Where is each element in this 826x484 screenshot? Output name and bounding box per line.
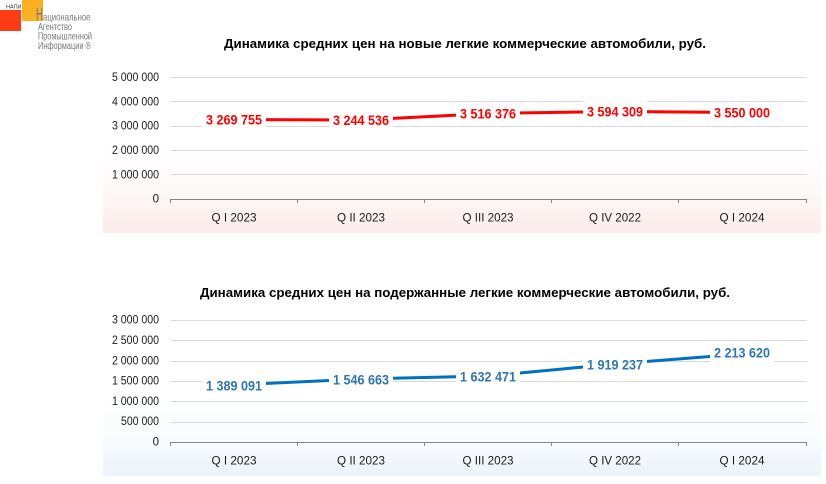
- x axis and labels: Q I 2023: [212, 212, 256, 224]
- logo: НАПИ: НАПИ: [6, 4, 22, 10]
- y axis gridlines and labels: 1 500 000: [112, 376, 159, 388]
- data labels: used vehicle prices: 1 389 091: [206, 378, 262, 394]
- y axis gridlines and labels: [112, 314, 806, 448]
- panel background: red gradient: [103, 140, 821, 233]
- data labels: new vehicle prices: 3 269 755: [206, 112, 262, 128]
- x axis and labels: Q I 2024: [720, 212, 765, 224]
- y axis gridlines and labels: 5 000 000: [112, 72, 159, 84]
- data labels: new vehicle prices: 3 516 376: [460, 106, 516, 122]
- panel: new vehicles chart: [103, 37, 821, 233]
- line series: new vehicle prices: [234, 112, 742, 120]
- logo: НАПИ: Агентство: [38, 21, 72, 33]
- y axis gridlines and labels: 3 000 000: [112, 120, 159, 132]
- x axis and labels: Q IV 2022: [589, 212, 641, 224]
- line series: used vehicle prices: [234, 354, 742, 385]
- logo: НАПИ: ациональное: [43, 12, 91, 24]
- x axis and labels: Q III 2023: [462, 212, 514, 224]
- y axis gridlines and labels: 2 000 000: [112, 145, 159, 157]
- panel: used vehicles chart: [103, 286, 821, 476]
- x axis and labels: Q II 2023: [337, 456, 385, 468]
- data labels: new vehicle prices: 3 244 536: [333, 113, 389, 128]
- panel background: blue gradient: [103, 395, 821, 476]
- data labels: new vehicle prices: [202, 101, 774, 130]
- y axis gridlines and labels: 3 000 000: [112, 314, 159, 326]
- logo: НАПИ: Н: [36, 4, 43, 24]
- logo: НАПИ: [0, 0, 92, 52]
- data labels: used vehicle prices: 1 632 471: [460, 370, 516, 384]
- x axis and labels: Q I 2024: [720, 456, 765, 468]
- y axis gridlines and labels: 2 000 000: [112, 356, 159, 368]
- y axis gridlines and labels: 0: [153, 436, 159, 448]
- heading: used vehicles: Динамика средних цен на подержанные легкие коммерческие автомобили, руб.: [200, 286, 730, 300]
- data labels: used vehicle prices: 1 919 237: [587, 358, 643, 372]
- x axis and labels: Q I 2023: [212, 456, 256, 468]
- x axis and labels: [170, 442, 806, 468]
- y axis gridlines and labels: 4 000 000: [112, 96, 159, 108]
- y axis gridlines and labels: 500 000: [121, 416, 159, 428]
- y axis gridlines and labels: 1 000 000: [112, 170, 159, 182]
- x axis and labels: [170, 200, 806, 224]
- data labels: used vehicle prices: 1 546 663: [333, 372, 389, 388]
- data labels: new vehicle prices: 3 550 000: [714, 106, 770, 120]
- logo: НАПИ: Информации ®: [38, 40, 91, 52]
- y axis gridlines and labels: 0: [153, 194, 159, 206]
- data labels: new vehicle prices: 3 594 309: [587, 104, 643, 120]
- y axis gridlines and labels: 2 500 000: [112, 335, 159, 347]
- y axis gridlines and labels: 1 000 000: [112, 396, 159, 408]
- data labels: used vehicle prices: 2 213 620: [714, 346, 770, 360]
- x axis and labels: Q II 2023: [337, 212, 385, 224]
- data labels: used vehicle prices: [202, 342, 774, 396]
- y axis gridlines and labels: [112, 72, 806, 206]
- logo: НАПИ: Промышленной: [38, 30, 92, 42]
- x axis and labels: Q III 2023: [462, 456, 514, 468]
- heading: new vehicles: Динамика средних цен на новые легкие коммерческие автомобили, руб.: [224, 37, 706, 51]
- x axis and labels: Q IV 2022: [589, 456, 641, 468]
